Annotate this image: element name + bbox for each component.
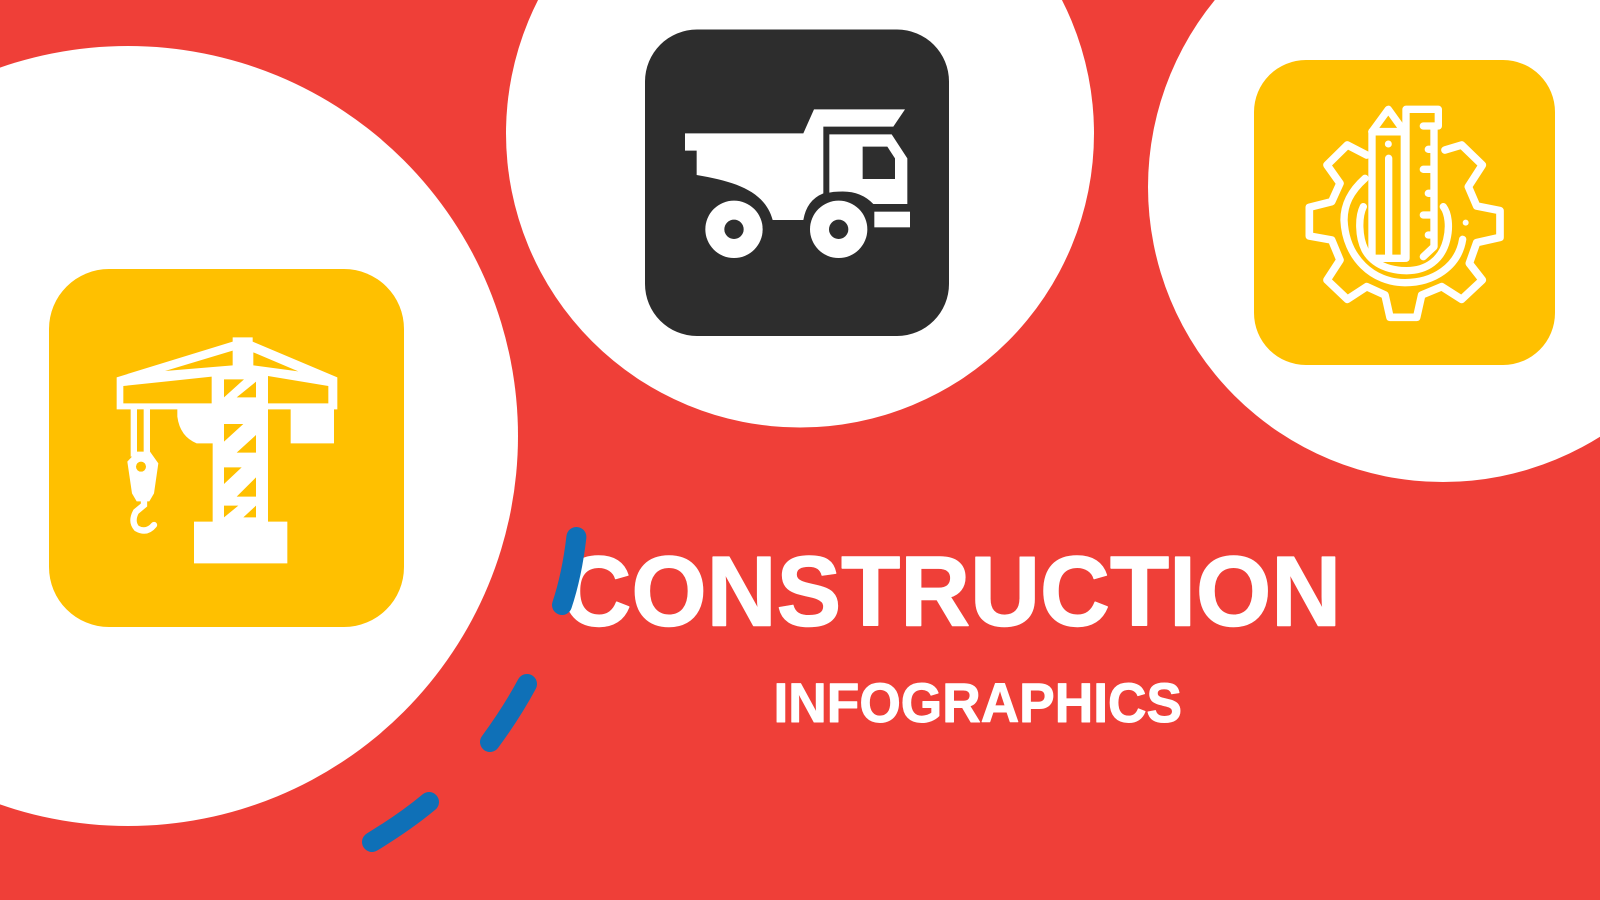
icon: gear with pencil and ruler [1309, 109, 1500, 317]
icon: dump truck [685, 109, 910, 258]
panel: dump truck icon tile [645, 30, 949, 336]
subtitle: INFOGRAPHICS: INFOGRAPHICS [774, 672, 1182, 734]
decorative arc: blue dash 3 [372, 802, 429, 842]
white circle: left [0, 46, 518, 826]
decorative arc: blue dash 2 [490, 684, 527, 742]
white circle: top centre [506, 0, 1094, 428]
title: CONSTRUCTION: CONSTRUCTION [562, 535, 1341, 647]
icon: tower crane [117, 337, 337, 563]
panel: crane icon tile [49, 269, 404, 627]
white circle: right [1148, 0, 1600, 482]
decorative arc: blue dash 1 [562, 537, 576, 605]
panel: engineering gear icon tile [1254, 60, 1555, 365]
